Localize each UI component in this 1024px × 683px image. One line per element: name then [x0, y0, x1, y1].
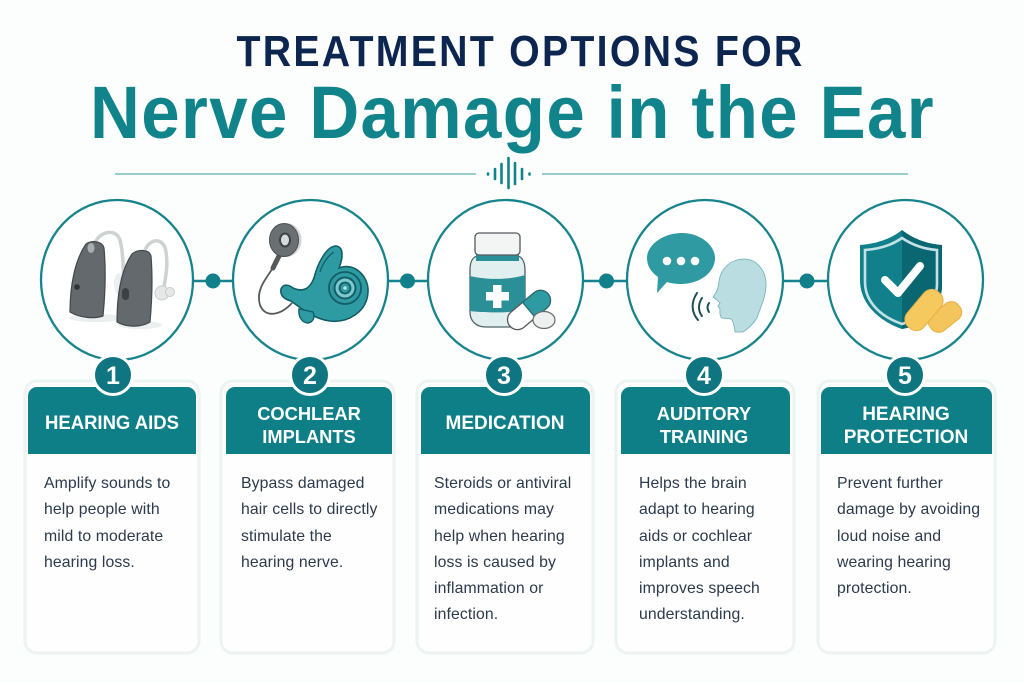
card 5 text: Prevent further — [837, 475, 943, 492]
card 4 text: improves speech — [639, 580, 760, 597]
icon: hearing aids — [69, 232, 174, 329]
badge 1 — [94, 356, 132, 394]
card 4 heading: TRAINING — [660, 426, 748, 447]
circle 2 — [233, 200, 388, 360]
card 1 — [25, 381, 199, 653]
card 2 header — [226, 387, 392, 454]
card 4 text: implants and — [639, 554, 730, 571]
card 2 text: hair cells to directly — [241, 501, 378, 518]
card 5 text: wearing hearing — [836, 554, 951, 571]
card 3 text: loss is caused by — [434, 554, 556, 571]
card 1 text: help people with — [44, 501, 160, 518]
card 3 text: medications may — [434, 501, 554, 518]
circle 4 — [627, 200, 783, 360]
icon: medicine bottle and pills — [470, 233, 555, 334]
badge 3: 3 — [497, 362, 511, 390]
card 4 text: Helps the brain — [639, 475, 747, 492]
card 5 header — [821, 387, 992, 454]
card 3 text: Steroids or antiviral — [434, 475, 571, 492]
title line 2: Nerve Damage in the Ear — [90, 71, 935, 154]
card 2 — [221, 381, 394, 653]
card 4 text: understanding. — [639, 606, 745, 623]
badge 5 — [886, 356, 924, 394]
card 2 text: hearing nerve. — [241, 554, 343, 571]
icon: shield with check and earplugs — [860, 230, 965, 336]
card 1 header — [28, 387, 196, 454]
card 2 text: stimulate the — [241, 528, 332, 545]
card 1 text: hearing loss. — [44, 554, 135, 571]
badge 1: 1 — [106, 362, 120, 390]
card 3 — [417, 381, 593, 653]
card 1 text: Amplify sounds to — [44, 475, 170, 492]
badge 2: 2 — [303, 362, 317, 390]
card 4 heading: AUDITORY — [657, 403, 751, 424]
card 2 heading: IMPLANTS — [262, 426, 356, 447]
card 5 text: protection. — [837, 580, 912, 597]
card 5 heading: HEARING — [862, 404, 950, 425]
title — [90, 27, 935, 154]
card 3 text: infection. — [434, 606, 498, 623]
circle 1 — [41, 200, 193, 360]
badge 2 — [290, 356, 330, 394]
connector line — [193, 274, 829, 288]
card 3 text: help when hearing — [434, 528, 565, 545]
card 4 — [616, 381, 794, 653]
badge 4: 4 — [697, 362, 711, 390]
card 5 text: loud noise and — [837, 528, 941, 545]
card 1 heading: HEARING AIDS — [45, 413, 179, 434]
card 5 text: damage by avoiding — [837, 501, 980, 518]
card 2 heading: COCHLEAR — [257, 403, 361, 424]
card 3 text: inflammation or — [434, 580, 544, 597]
divider with sound wave — [115, 158, 908, 188]
card 4 text: adapt to hearing — [639, 501, 755, 518]
icon: cochlear implant — [259, 223, 368, 323]
card 3 heading: MEDICATION — [446, 413, 564, 434]
card 3 header — [421, 387, 590, 454]
badge 4 — [684, 356, 724, 394]
card 1 text: mild to moderate — [44, 528, 163, 545]
card 5 heading: PROTECTION — [844, 427, 968, 448]
icon: speech bubble and head — [647, 233, 766, 332]
badge 3 — [484, 356, 524, 394]
card 4 text: aids or cochlear — [639, 528, 752, 545]
circle 5 — [828, 200, 983, 360]
title line 1: TREATMENT OPTIONS FOR — [236, 27, 804, 76]
card 5 — [818, 381, 995, 653]
badge 5: 5 — [898, 362, 912, 390]
circle 3 — [428, 200, 583, 360]
card 4 header — [621, 387, 790, 454]
card 2 text: Bypass damaged — [241, 475, 364, 492]
